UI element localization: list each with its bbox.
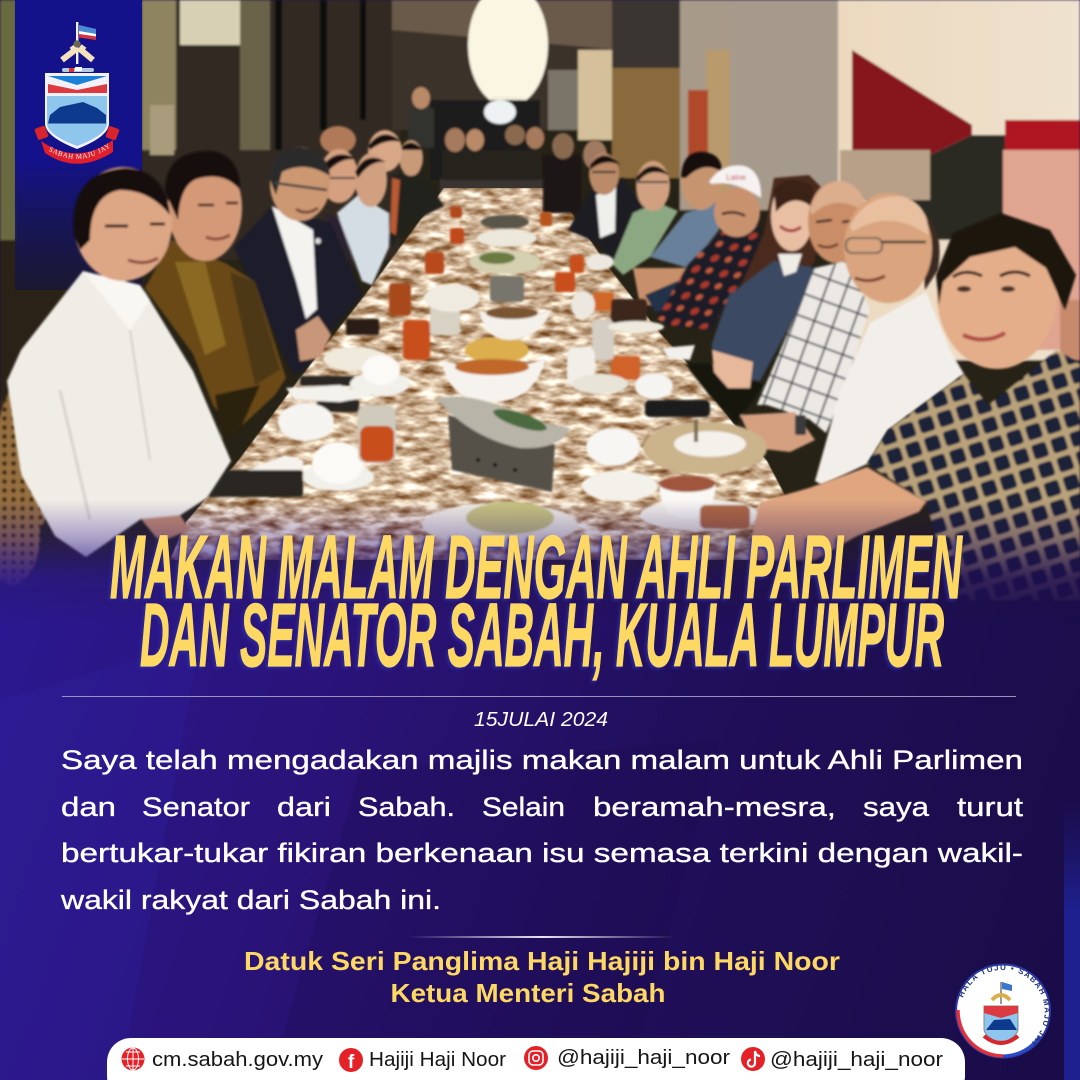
body text bbox=[60, 745, 1024, 915]
person: left back pair bbox=[320, 126, 444, 247]
facebook: Hajiji Haji Noor bbox=[369, 1049, 506, 1071]
tiktok: @hajiji_haji_noor bbox=[770, 1049, 943, 1071]
person: batik shirt with cap: Laine bbox=[726, 173, 746, 182]
body text: bertukar-tukar fikiran berkenaan isu semasa terkini dengan wakil- bbox=[61, 838, 1023, 868]
person: black suit bbox=[568, 153, 643, 261]
body line 2: justified words: dan bbox=[61, 792, 116, 822]
near-side people bbox=[7, 126, 1080, 600]
website: cm.sabah.gov.my bbox=[152, 1049, 323, 1071]
person: gold shirt bbox=[145, 151, 286, 438]
body line 2: justified words: Sabah. bbox=[358, 792, 455, 822]
photo: restaurant interior bbox=[0, 0, 1080, 640]
body line 2: justified words: beramah-mesra, bbox=[593, 792, 836, 822]
person: blue shirt bbox=[633, 152, 722, 312]
person: front right with check shirt bbox=[750, 213, 1080, 600]
crest: Sabah coat of arms bbox=[34, 22, 120, 164]
body line 2: justified words bbox=[61, 792, 1024, 822]
banner behind crest bbox=[15, 0, 142, 290]
person: back row right bbox=[543, 133, 607, 213]
table: marble top bbox=[170, 188, 790, 560]
body line 2: justified words: dari bbox=[277, 792, 331, 822]
signature: name and role: Ketua Menteri Sabah bbox=[390, 978, 666, 1008]
background panel: purple gradient bbox=[0, 480, 1080, 1080]
facebook bbox=[339, 1048, 506, 1073]
facebook: f bbox=[348, 1052, 355, 1073]
drinks bbox=[358, 206, 640, 463]
person: batik shirt with cap bbox=[657, 165, 761, 330]
person: white shirt left bbox=[7, 167, 231, 557]
plates and bowls on right bbox=[567, 299, 767, 531]
icon: flag and arms bbox=[62, 22, 96, 72]
body line 2: justified words: saya bbox=[863, 792, 930, 822]
person: checked shirt bbox=[740, 181, 870, 452]
signature: name and role bbox=[244, 946, 840, 1008]
icon: motto ribbon bbox=[34, 126, 120, 164]
table settings bbox=[207, 206, 767, 547]
chair: wicker back bbox=[0, 380, 55, 585]
photo: dinner group bbox=[0, 0, 1080, 640]
person: light blue shirt bbox=[320, 149, 389, 285]
body line 2: justified words: Selain bbox=[482, 792, 565, 822]
far-side people bbox=[543, 133, 964, 485]
signature: name and role: Datuk Seri Panglima Haji Hajiji bin Haji Noor bbox=[244, 946, 840, 976]
tiktok bbox=[741, 1047, 943, 1071]
badge: Hala Tuju logo: HALA TUJU • SABAH MAJU JAYA bbox=[958, 964, 1050, 1047]
person: white shirt with glasses bbox=[815, 193, 964, 485]
body text: Saya telah mengadakan majlis makan malam untuk Ahli Parlimen bbox=[61, 745, 1023, 775]
body line 2: justified words: Senator bbox=[142, 792, 250, 822]
steamer dish bbox=[436, 396, 570, 492]
icon: shield bbox=[45, 73, 109, 149]
person: lady in navy jacket bbox=[685, 175, 822, 423]
serving dishes bbox=[424, 215, 614, 402]
social bar bbox=[107, 1038, 965, 1080]
person: green shirt bbox=[612, 161, 678, 275]
body text: wakil rakyat dari Sabah ini. bbox=[60, 885, 441, 915]
instagram: @hajiji_haji_noor bbox=[557, 1047, 730, 1069]
title bbox=[110, 518, 963, 686]
body line 2: justified words: turut bbox=[957, 792, 1024, 822]
instagram bbox=[524, 1046, 730, 1070]
salad plate bbox=[422, 502, 578, 547]
person: dark suit with glasses bbox=[234, 147, 362, 374]
date: 15JULAI 2024 bbox=[474, 709, 608, 731]
